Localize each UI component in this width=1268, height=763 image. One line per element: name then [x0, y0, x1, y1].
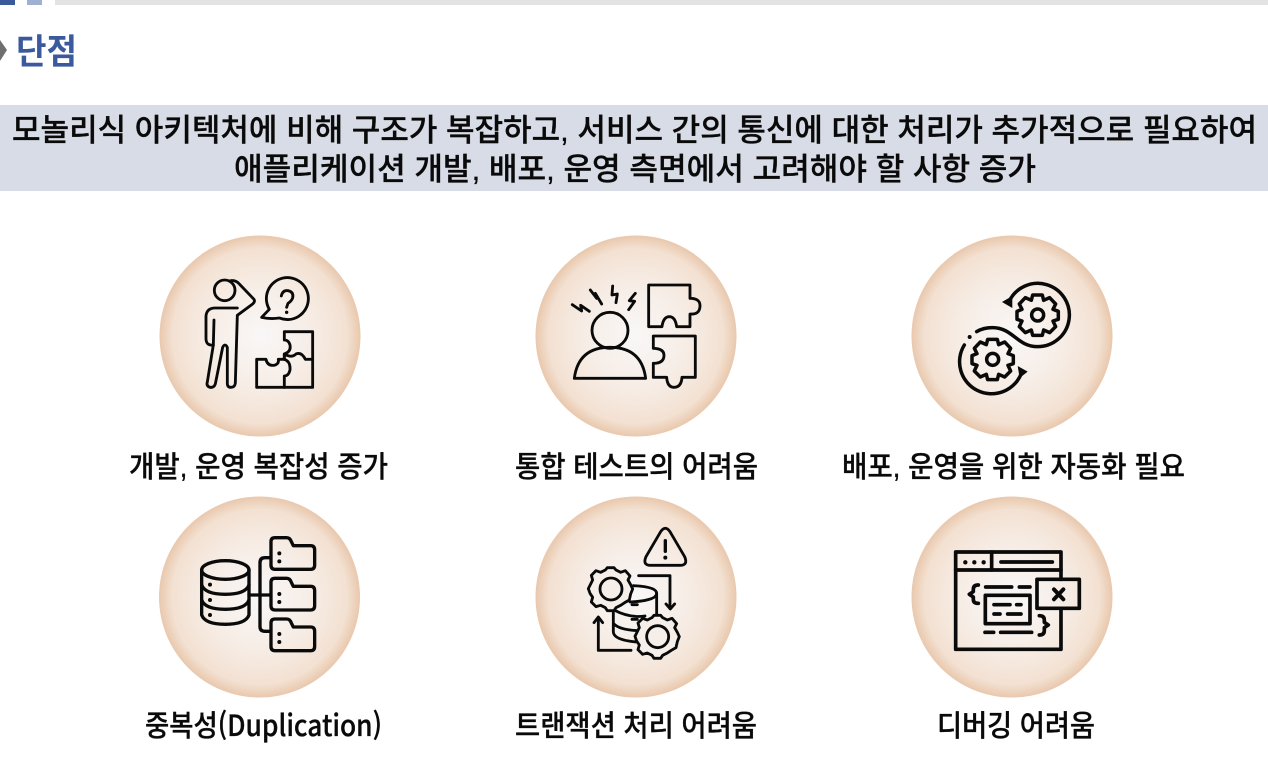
item: 중복성(Duplication): 중복성(Duplication): [145, 703, 382, 745]
icon: confused person with puzzle: [206, 278, 313, 387]
item: 디버깅 어려움: [912, 496, 1112, 743]
icon: stressed person with puzzle pieces: [572, 285, 700, 387]
item: 디버깅 어려움: 디버깅 어려움: [937, 710, 1095, 743]
icon: rotating gears: [960, 283, 1069, 394]
item: 배포, 운영을 위한 자동화 필요: 배포, 운영을 위한 자동화 필요: [842, 451, 1185, 484]
icon: code window with error: [956, 552, 1079, 649]
icon: heading diamond: [0, 40, 7, 61]
top accent bars: [0, 0, 1268, 5]
item: 배포, 운영을 위한 자동화 필요: [842, 236, 1185, 484]
section heading: 단점: [16, 33, 77, 72]
icon: warning, gears and database: [588, 528, 686, 658]
summary band: [0, 105, 1268, 191]
item: 트랜잭션 처리 어려움: 트랜잭션 처리 어려움: [515, 710, 757, 743]
summary band: 애플리케이션 개발, 배포, 운영 측면에서 고려해야 할 사항 증가: [234, 152, 1036, 187]
item: 통합 테스트의 어려움: [515, 236, 758, 484]
item: 개발, 운영 복잡성 증가: [129, 236, 388, 484]
item: 통합 테스트의 어려움: 통합 테스트의 어려움: [515, 451, 758, 484]
item: 트랜잭션 처리 어려움: [515, 496, 757, 743]
summary band: 모놀리식 아키텍처에 비해 구조가 복잡하고, 서비스 간의 통신에 대한 처리가 추가적으로 필요하여: [12, 113, 1257, 148]
item: 중복성(Duplication): [145, 496, 382, 745]
icon: database with folders: [202, 538, 315, 651]
item: 개발, 운영 복잡성 증가: 개발, 운영 복잡성 증가: [129, 451, 388, 484]
